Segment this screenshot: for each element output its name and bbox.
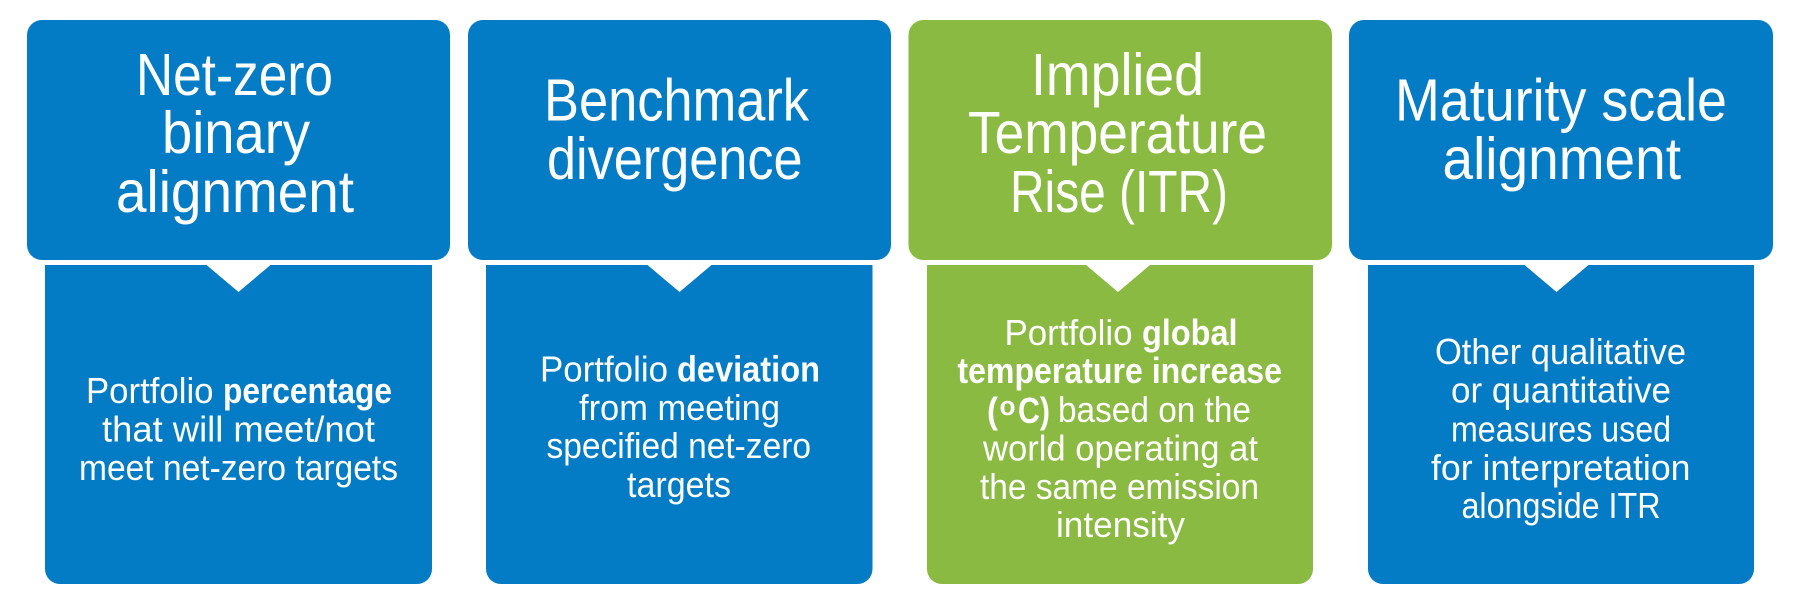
- description text: world operating at: [982, 428, 1258, 469]
- description box with notch: [1368, 265, 1754, 584]
- heading: benchmark divergence: Benchmark: [544, 68, 809, 134]
- heading: maturity scale alignment: [1395, 68, 1727, 192]
- description text: [79, 370, 398, 488]
- description text: Portfolio: [540, 349, 668, 390]
- description text: for interpretation: [1431, 447, 1690, 488]
- heading: net-zero binary alignment: Net-zero: [136, 42, 333, 108]
- heading: implied temperature rise: Rise (ITR): [1010, 159, 1228, 225]
- header box: net-zero binary alignment: [27, 20, 450, 260]
- description text: Other qualitative: [1435, 331, 1686, 372]
- description text: [540, 349, 820, 505]
- heading: implied temperature rise: Implied: [1031, 42, 1204, 108]
- description text: or quantitative: [1451, 370, 1671, 411]
- heading: net-zero binary alignment: [116, 42, 354, 225]
- heading: maturity scale alignment: Maturity scale: [1395, 68, 1727, 134]
- heading: maturity scale alignment: alignment: [1442, 126, 1681, 192]
- description box with notch: [45, 265, 432, 584]
- description text: temperature increase: [957, 350, 1282, 391]
- panel: maturity scale alignment: [1349, 20, 1773, 584]
- description box with notch: [927, 265, 1313, 584]
- description text: deviation: [677, 349, 820, 390]
- header box: benchmark divergence: [468, 20, 891, 260]
- description text: based on the: [1058, 389, 1251, 430]
- heading: implied temperature rise: Temperature: [968, 100, 1267, 166]
- heading: benchmark divergence: [544, 68, 809, 192]
- heading: net-zero binary alignment: alignment: [116, 159, 354, 225]
- description text: that will meet/not: [102, 409, 375, 450]
- description text: meet net-zero targets: [79, 447, 398, 488]
- description text: percentage: [223, 370, 392, 411]
- description text: C): [1018, 390, 1050, 431]
- header box: implied temperature rise: [908, 20, 1332, 260]
- heading: net-zero binary alignment: binary: [162, 100, 310, 166]
- description text: [1431, 331, 1690, 526]
- description text: intensity: [1056, 504, 1185, 545]
- description text: [957, 312, 1282, 545]
- description text: targets: [627, 464, 731, 505]
- description text: (: [987, 390, 998, 431]
- description text: global: [1142, 312, 1238, 353]
- description text: from meeting: [579, 387, 780, 428]
- heading: benchmark divergence: divergence: [547, 126, 802, 192]
- description text: o: [1000, 391, 1016, 421]
- description text: Portfolio: [1004, 312, 1132, 353]
- header box: maturity scale alignment: [1349, 20, 1773, 260]
- description text: the same emission: [980, 466, 1259, 507]
- heading: implied temperature rise: [968, 42, 1267, 225]
- description text: Portfolio: [86, 370, 214, 411]
- panel: net-zero binary alignment: [27, 20, 450, 584]
- panel: benchmark divergence: [468, 20, 891, 584]
- panel: implied temperature rise: [908, 20, 1332, 584]
- description text: alongside ITR: [1462, 485, 1660, 526]
- description text: specified net-zero: [546, 425, 811, 466]
- description text: measures used: [1451, 409, 1671, 450]
- description box with notch: [486, 265, 872, 584]
